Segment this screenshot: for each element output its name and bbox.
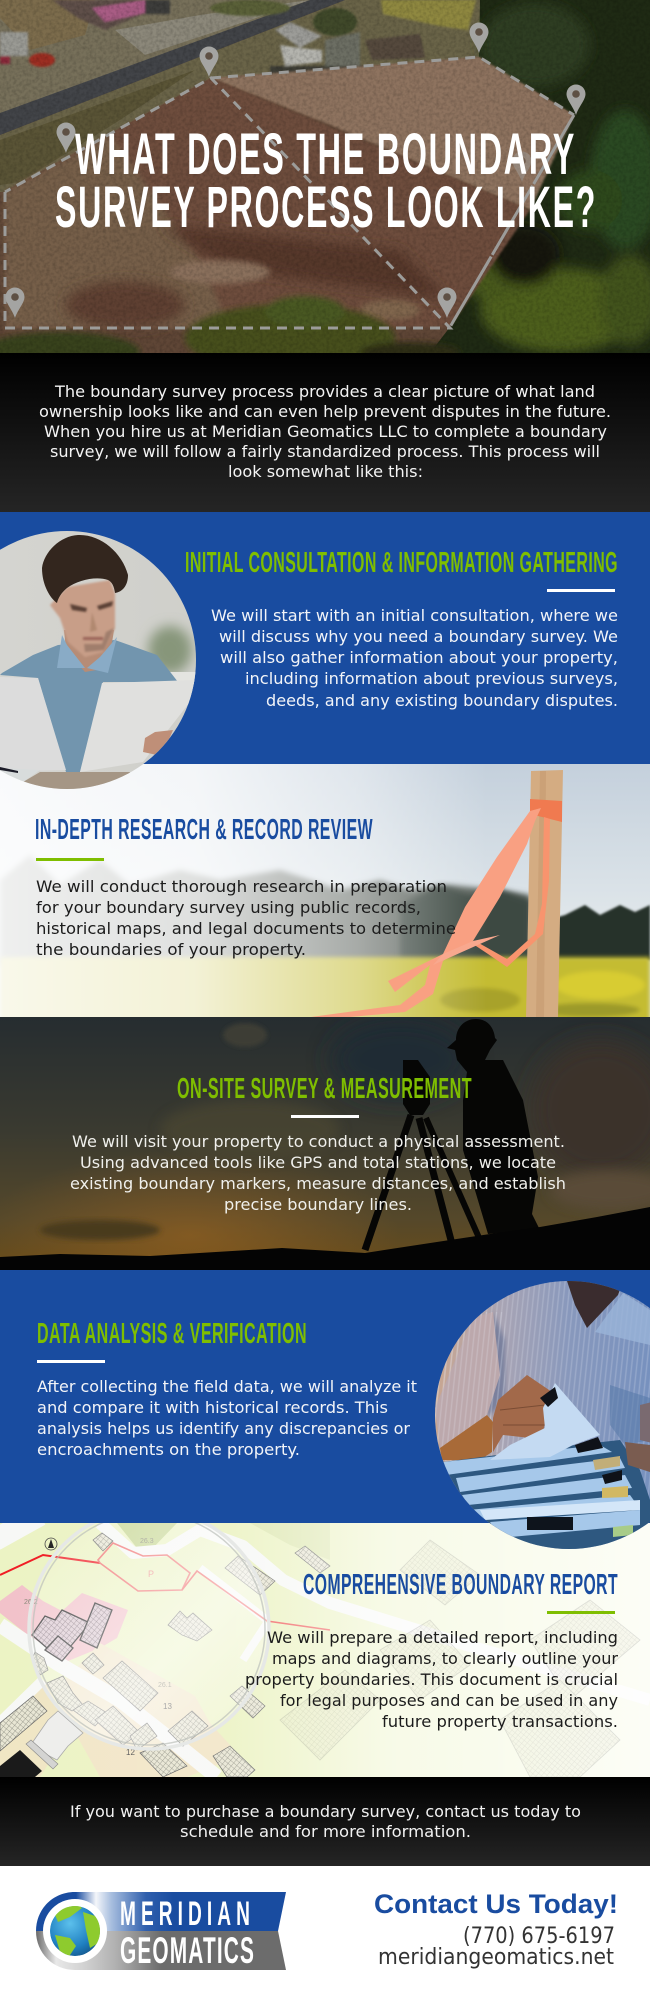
map: beige lots (78, 1643, 230, 1777)
photo: white fade (0, 764, 476, 1017)
man: papers (0, 675, 66, 773)
aerial: trees along bottom edge (0, 294, 458, 353)
man: collar (57, 635, 117, 673)
map: pink parcels (0, 1585, 128, 1663)
step 1 text: will discuss why you need a boundary survey. We (219, 627, 618, 646)
intro text: survey, we will follow a fairly standardized process. This process will (50, 442, 600, 461)
step 5 text: maps and diagrams, to clearly outline your (272, 1649, 618, 1668)
step 3 text (70, 1132, 566, 1214)
man: desk (20, 772, 130, 795)
step 3 text: We will visit your property to conduct a physical assessment. (72, 1132, 565, 1151)
aerial: farmland and concrete above the road (0, 0, 320, 120)
step 1 text (211, 606, 618, 710)
website: meridiangeomatics.net (378, 1945, 614, 1970)
step 4 text: and compare it with historical records. This (37, 1398, 388, 1417)
panel: step 3 on-site survey (0, 1017, 650, 1270)
map: lot labels: 26.1 (158, 1682, 172, 1689)
man: face (50, 580, 115, 657)
step 1 text: deeds, and any existing boundary disputes. (266, 691, 618, 710)
logo: globe (50, 1905, 101, 1958)
logo: white ring (43, 1899, 107, 1963)
magnifying glass lens (29, 1509, 269, 1749)
man: hair (42, 535, 128, 603)
contact heading: Contact Us Today! (374, 1889, 618, 1919)
docs: second hand (625, 1442, 650, 1472)
photo: blurred tree line (0, 855, 530, 965)
docs: shoulder at right (640, 1400, 650, 1445)
man: plant (148, 626, 192, 674)
title (55, 122, 597, 240)
intro text: ownership looks like and can even help prevent disputes in the future. (39, 402, 611, 421)
logo: grey banner (36, 1931, 286, 1970)
step 5 text: future property transactions. (382, 1712, 618, 1731)
photo: yellow canola field (0, 957, 650, 1022)
docs: hand (493, 1375, 552, 1452)
photo: survey stake (526, 770, 563, 1017)
map: compass mark (45, 1538, 57, 1550)
step 1 text: will also gather information about your property, (220, 648, 618, 667)
intro text (39, 382, 611, 481)
logo: wordmark: GEOMATICS (120, 1930, 255, 1971)
logo: blue banner (36, 1892, 286, 1931)
step 2 text: We will conduct thorough research in preparation (36, 877, 447, 896)
docs: pocket shadow (610, 1385, 650, 1445)
map: lot labels: 13 (163, 1702, 172, 1711)
photo circle: hand sorting stacked documents (435, 1281, 650, 1560)
boundary dashed lines (5, 57, 574, 328)
docs: top sheet (490, 1383, 600, 1460)
step 5 text: We will prepare a detailed report, including (267, 1628, 618, 1647)
docs: collar and placket (595, 1293, 650, 1345)
photo: orange ribbon knot (530, 799, 562, 822)
closing text: If you want to purchase a boundary survey, contact us today to (70, 1802, 581, 1821)
map: red boundary lines (0, 1543, 330, 1630)
step 5 text: for legal purposes and can be used in any (280, 1691, 618, 1710)
photo: sunset glow and clouds (0, 1020, 650, 1320)
magnifying glass handle (0, 1711, 83, 1777)
step 1 text: including information about previous surveys, (245, 669, 618, 688)
man: shirt (0, 640, 178, 772)
step 4 text: After collecting the field data, we will analyze it (37, 1377, 417, 1396)
step 2 heading: IN-DEPTH RESEARCH & RECORD REVIEW (35, 814, 373, 846)
step 2 text: the boundaries of your property. (36, 940, 306, 959)
logo (36, 1892, 286, 1971)
map: dark outlined buildings (32, 1603, 112, 1661)
map: faded right side (127, 1523, 650, 1777)
phone number: (770) 675-6197 (463, 1924, 615, 1949)
aerial: tree canopy on the right (430, 0, 650, 353)
photo circle: man reading documents (0, 531, 200, 798)
step 3 text: precise boundary lines. (224, 1195, 412, 1214)
aerial: road (0, 0, 345, 135)
aerial: bare soil parcel upper (211, 57, 574, 210)
docs: sleeve (435, 1312, 500, 1448)
docs: neck (567, 1281, 623, 1328)
man: hand (143, 730, 173, 755)
step 1 text: We will start with an initial consultation, where we (211, 606, 618, 625)
intro text: The boundary survey process provides a clear picture of what land (54, 382, 595, 401)
panel: step 2 research photo (0, 764, 650, 1022)
footer (0, 1866, 650, 2000)
map: lot labels: P (148, 1569, 154, 1579)
step 4 text: analysis helps us identify any discrepancies or (37, 1419, 410, 1438)
aerial: grass verge above left boundary (0, 0, 480, 192)
aerial: buildings (0, 0, 476, 80)
map: lot labels (24, 1538, 172, 1757)
docs: forearm (440, 1415, 493, 1460)
map: faint buildings at right (280, 1540, 640, 1777)
photo: ribbon streamers (311, 808, 550, 1017)
intro text: look somewhat like this: (228, 462, 423, 481)
docs: paper stack (443, 1440, 650, 1560)
panel: step 4 data analysis (0, 1270, 650, 1523)
panel: closing call to action (0, 1777, 650, 1866)
step 4 heading: DATA ANALYSIS & VERIFICATION (37, 1318, 307, 1350)
map: lot labels: 12 (126, 1748, 135, 1757)
man: neck (64, 630, 114, 672)
docs: binder clips and tabs (527, 1387, 633, 1537)
map: lot labels: 26.3 (140, 1538, 154, 1545)
photo: dark tree line at right (559, 904, 650, 962)
step 2 text: for your boundary survey using public records, (36, 898, 421, 917)
step 4 text: encroachments on the property. (37, 1440, 300, 1459)
step 2 text (36, 877, 456, 959)
man: notebook and pen (0, 768, 40, 782)
step 5 text (245, 1628, 618, 1731)
panel: step 5 boundary report map (0, 1509, 650, 1777)
photo: hill silhouette (0, 1207, 650, 1270)
map: hatched buildings (0, 1533, 330, 1777)
panel: step 1 initial consultation (0, 512, 650, 764)
location pins (6, 22, 586, 318)
man: facial features (70, 601, 114, 652)
logo: wordmark (120, 1895, 255, 1971)
texture (0, 0, 650, 353)
step 3 text: Using advanced tools like GPS and total stations, we locate (80, 1153, 556, 1172)
aerial: ploughed soil parcel lower (114, 79, 530, 327)
step 3 text: existing boundary markers, measure distances, and establish (70, 1174, 566, 1193)
docs: shadow between sleeve and body (487, 1312, 505, 1418)
intro text: When you hire us at Meridian Geomatics LLC to complete a boundary (44, 422, 607, 441)
hero: aerial photograph with boundary overlay (0, 0, 650, 372)
panel: introduction (0, 353, 650, 512)
step 4 text (37, 1377, 417, 1459)
step 5 text: property boundaries. This document is crucial (245, 1670, 618, 1689)
step 2 text: historical maps, and legal documents to determine (36, 919, 456, 938)
photo: surveyor silhouette (365, 1019, 540, 1250)
map: darker green plot (117, 1523, 177, 1547)
map: lot labels: 26.2 (24, 1599, 38, 1606)
closing text: schedule and for more information. (180, 1822, 471, 1841)
map: white roads (0, 1515, 650, 1777)
logo: wordmark: MERIDIAN (120, 1895, 255, 1933)
closing text (70, 1802, 581, 1841)
